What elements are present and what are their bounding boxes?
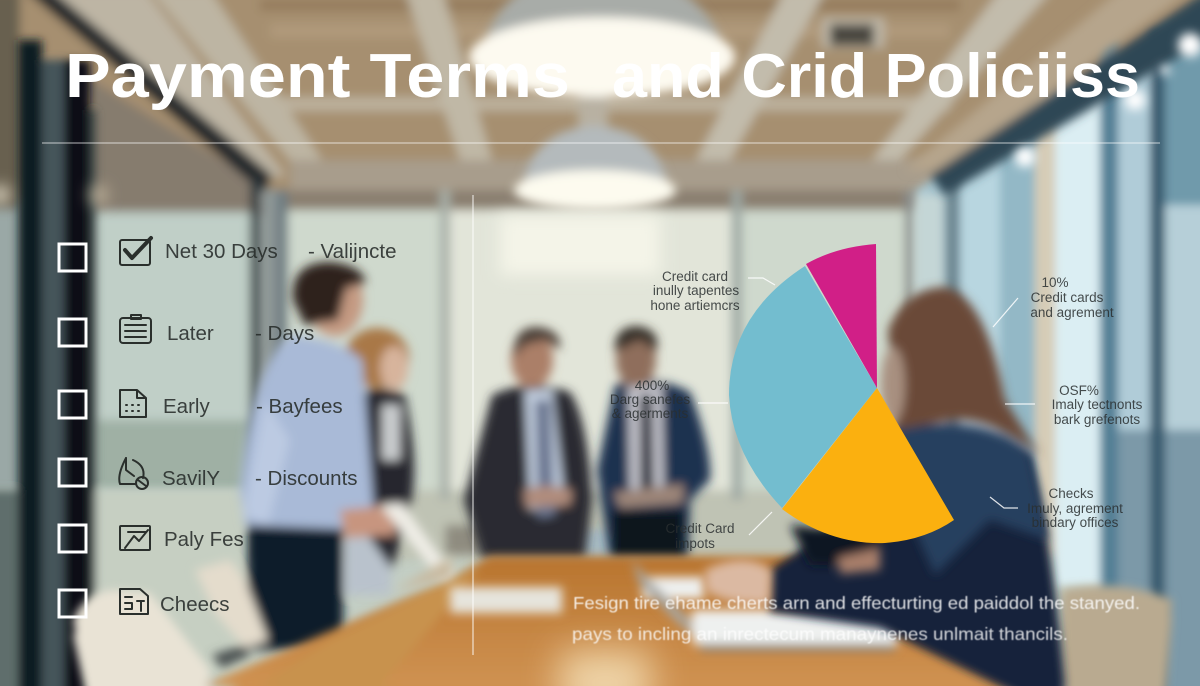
table items <box>450 587 562 613</box>
callout: OSF percent: bark grefenots <box>1054 412 1140 427</box>
callout: checks <box>1027 486 1123 530</box>
row: checks: Cheecs <box>160 593 230 616</box>
left diagonal wall above glass <box>60 60 270 215</box>
callout: credit card bottom: impots <box>675 536 715 551</box>
callout connectors <box>698 278 1035 535</box>
callout: 400 percent: 400% <box>635 378 669 393</box>
slice: yellow <box>782 388 954 543</box>
row: later days: Later <box>167 322 214 345</box>
callout: credit card top left <box>650 269 740 313</box>
footer text <box>572 593 1140 644</box>
callout: credit card top left: inully tapentes <box>653 283 739 298</box>
slice: teal <box>729 266 877 508</box>
pie chart: payment methods <box>729 244 954 543</box>
row: early bayfees: Early <box>163 395 210 418</box>
row: net 30 days: Net 30 Days <box>165 240 278 263</box>
man 4 <box>597 380 710 558</box>
callout: credit card bottom: Credit Card <box>665 521 735 536</box>
row: later days <box>59 315 314 346</box>
row: pay fees: Paly Fes <box>164 528 244 551</box>
row: savily discounts: SavilY <box>162 467 220 490</box>
row: savily discounts: - Discounts <box>255 467 358 490</box>
callout: OSF percent <box>1052 383 1143 427</box>
row: net 30 days <box>59 238 396 271</box>
woman right <box>770 430 1065 686</box>
footer text: Fesign tire ehame cherts arn and effecturting ed paiddol the stanyed. <box>573 593 1140 613</box>
man 3 <box>464 386 592 558</box>
ceiling <box>0 0 1200 200</box>
callout: 10 percent credit cards: 10% <box>1041 275 1069 290</box>
callout: checks: bindary offices <box>1032 515 1119 530</box>
callout: 10 percent credit cards: and agrement <box>1030 305 1114 320</box>
callout: OSF percent: Imaly tectnonts <box>1052 397 1143 412</box>
callout: checks: Checks <box>1048 486 1094 501</box>
row: early bayfees: - Bayfees <box>256 395 343 418</box>
left glass <box>94 212 254 502</box>
callout: 10 percent credit cards: Credit cards <box>1031 290 1104 305</box>
title <box>65 42 1140 111</box>
callout: credit card top left: Credit card <box>662 269 728 284</box>
panel divider <box>472 195 474 655</box>
chairs and table <box>73 556 1172 686</box>
slice: magenta <box>806 244 877 388</box>
back wall panels <box>280 210 920 500</box>
title: and Crid Policiiss <box>612 42 1140 111</box>
row: pay fees <box>59 525 244 552</box>
callout: credit card top left: hone artiemcrs <box>650 298 740 313</box>
right glass <box>915 100 1040 560</box>
man 1 <box>248 515 343 650</box>
callout: credit card bottom <box>665 521 735 551</box>
callout: checks: Imuly, agrement <box>1027 501 1123 516</box>
callout: OSF percent: OSF% <box>1059 383 1099 398</box>
row: net 30 days: - Valijncte <box>308 240 396 263</box>
title rule <box>42 142 1160 144</box>
panel: payment terms checklist <box>59 238 396 617</box>
woman 2 <box>345 500 391 595</box>
callout: 400 percent: Darg sanefes <box>610 392 690 407</box>
callout: 400 percent <box>610 378 690 421</box>
callout: 10 percent credit cards <box>1030 275 1114 320</box>
row: checks <box>59 589 230 617</box>
lamps <box>478 0 730 60</box>
row: later days: - Days <box>255 322 314 345</box>
title: Payment Terms <box>65 42 570 111</box>
callout: 400 percent: & agerments <box>612 406 689 421</box>
row: early bayfees <box>59 390 343 418</box>
row: savily discounts <box>59 458 358 490</box>
footer text: pays to incling an inrectecum manaynenes unlmait thancils. <box>572 624 1068 644</box>
